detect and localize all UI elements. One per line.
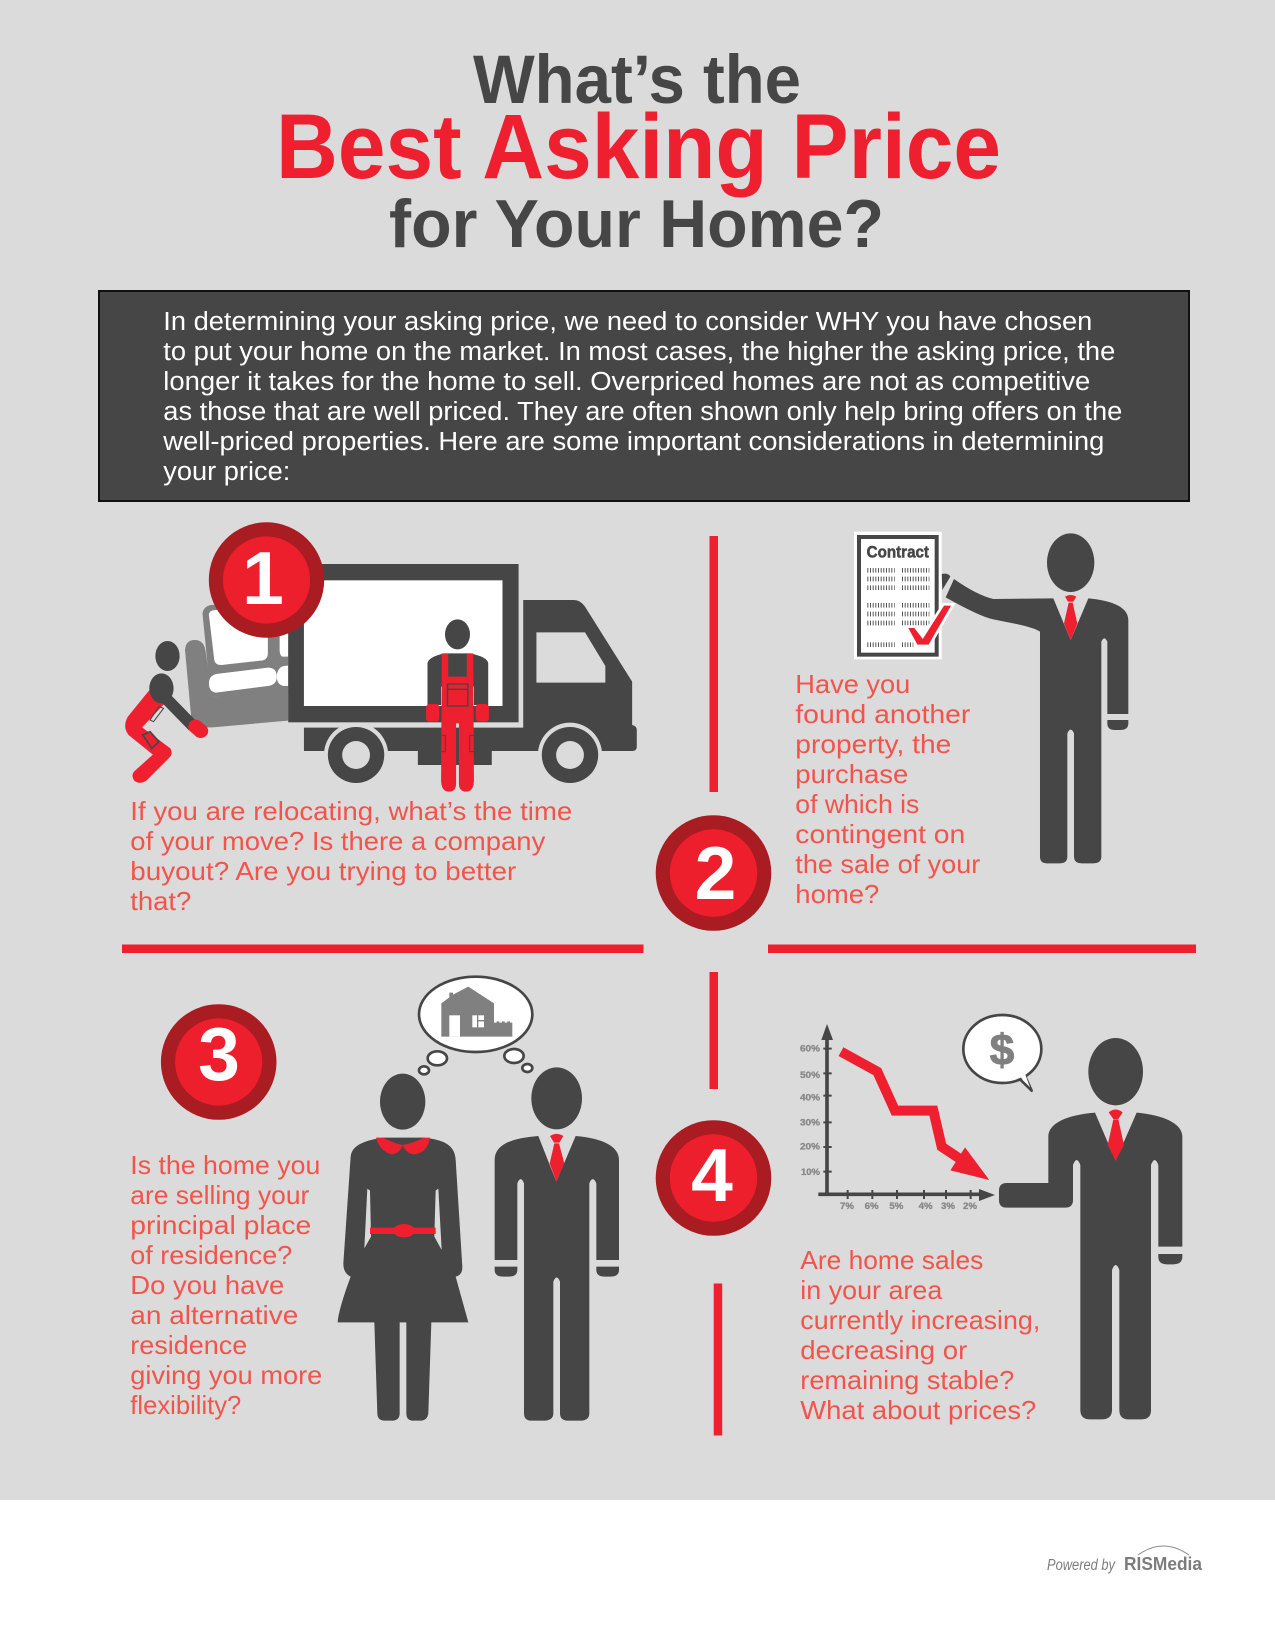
panel: intro text box: well-priced properties. Here are some important considerations in determining: [162, 428, 1104, 456]
panel: intro text box: In determining your asking price, we need to consider WHY you have chosen: [163, 308, 1092, 336]
text: step 3 question: an alternative: [130, 1300, 298, 1330]
illustration: standing mover: [426, 619, 489, 792]
icon: dollar speech bubble: [963, 1015, 1041, 1091]
title: What’s the: [473, 41, 801, 118]
chart: falling line graph: 30%: [800, 1117, 821, 1127]
text: step 2 question: [795, 669, 981, 909]
number badge 3: 3: [198, 1012, 240, 1096]
chart: falling line graph: 40%: [800, 1092, 821, 1102]
text: step 1 question: [130, 796, 572, 916]
text: step 3 question: residence: [130, 1330, 247, 1360]
text: step 4 question: decreasing or: [800, 1335, 968, 1365]
chart: falling line graph: 20%: [800, 1142, 821, 1152]
text: step 4 question: currently increasing,: [800, 1305, 1040, 1335]
text: step 4 question: remaining stable?: [800, 1365, 1014, 1395]
text: step 2 question: property, the: [795, 729, 951, 759]
chart: falling line graph: 7%: [840, 1201, 855, 1211]
number badge 2: 2: [695, 831, 736, 915]
chart: falling line graph: 2%: [963, 1201, 978, 1211]
panel: intro text box: your price:: [163, 458, 290, 486]
panel: step 4 market trends: [656, 1015, 1182, 1425]
text: step 3 question: [130, 1150, 322, 1420]
text: step 2 question: Have you: [795, 669, 910, 699]
icon: thought bubble with house: [419, 977, 532, 1074]
text: step 3 question: are selling your: [130, 1180, 310, 1210]
number badge 3: [161, 1004, 276, 1120]
illustration: man with arm raised: [942, 533, 1128, 863]
text: step 3 question: Is the home you: [130, 1150, 320, 1180]
panel: step 2 contingent purchase: [656, 532, 1128, 931]
icon: dollar speech bubble: $: [990, 1026, 1014, 1075]
chart: falling line graph: 10%: [801, 1167, 821, 1177]
number badge 4: 4: [691, 1133, 733, 1217]
illustration: man pointing at chart: [999, 1038, 1182, 1419]
chart: falling line graph: 5%: [889, 1201, 904, 1211]
number badge 1: [209, 522, 324, 638]
text: step 2 question: contingent on: [795, 819, 965, 849]
text: step 3 question: principal place: [130, 1210, 311, 1240]
text: step 1 question: buyout? Are you trying to better: [130, 856, 517, 886]
text: step 4 question: in your area: [800, 1275, 943, 1305]
text: step 4 question: Are home sales: [800, 1245, 983, 1275]
number badge 1: 1: [242, 536, 284, 620]
text: step 1 question: that?: [130, 886, 191, 916]
illustration: sofa: [185, 600, 288, 727]
number badge 2: [656, 815, 771, 931]
chart: falling line graph: 60%: [800, 1044, 821, 1054]
footer: Powered by RISMedia: RISMedia: [1124, 1554, 1203, 1574]
title: Best Asking Price: [276, 96, 1001, 198]
text: step 3 question: flexibility?: [130, 1390, 241, 1420]
chart: falling line graph: [800, 1024, 995, 1211]
text: step 4 question: [800, 1245, 1040, 1425]
illustration: crouching mover: [125, 641, 201, 783]
text: step 2 question: purchase: [795, 759, 908, 789]
illustration: woman: [338, 1074, 468, 1421]
text: step 1 question: If you are relocating, what’s the time: [130, 796, 572, 826]
icon: contract with check mark: [854, 532, 953, 659]
panel: intro text box: as those that are well priced. They are often shown only help bring offers on the: [163, 398, 1122, 426]
chart: falling line graph: 50%: [800, 1070, 821, 1080]
text: step 2 question: found another: [795, 699, 971, 729]
illustration: moving truck: [288, 564, 637, 788]
chart: falling line graph: 6%: [865, 1201, 879, 1211]
icon: contract with check mark: Contract: [867, 543, 929, 562]
text: step 4 question: What about prices?: [800, 1395, 1036, 1425]
panel: step 1 relocation: [125, 522, 637, 916]
text: step 1 question: of your move? Is there a company: [130, 826, 545, 856]
text: step 2 question: the sale of your: [795, 849, 981, 879]
text: step 3 question: giving you more: [130, 1360, 322, 1390]
panel: intro text box: to put your home on the market. In most cases, the higher the asking price, the: [163, 338, 1115, 366]
title: [276, 41, 1001, 262]
text: step 2 question: of which is: [795, 789, 919, 819]
illustration: man: [495, 1067, 619, 1421]
panel: intro text box: [99, 291, 1189, 501]
footer: Powered by RISMedia: Powered by: [1047, 1557, 1116, 1574]
panel: step 3 principal residence: [130, 977, 619, 1421]
text: step 3 question: of residence?: [130, 1240, 292, 1270]
number badge 4: [656, 1120, 771, 1236]
text: step 2 question: home?: [795, 879, 879, 909]
chart: falling line graph: 4%: [919, 1201, 933, 1211]
text: step 3 question: Do you have: [130, 1270, 284, 1300]
footer: Powered by RISMedia: [1047, 1546, 1203, 1574]
chart: falling line graph: 3%: [941, 1201, 956, 1211]
panel: intro text box: longer it takes for the home to sell. Overpriced homes are not as competitive: [163, 368, 1090, 396]
title: for Your Home?: [389, 186, 884, 262]
